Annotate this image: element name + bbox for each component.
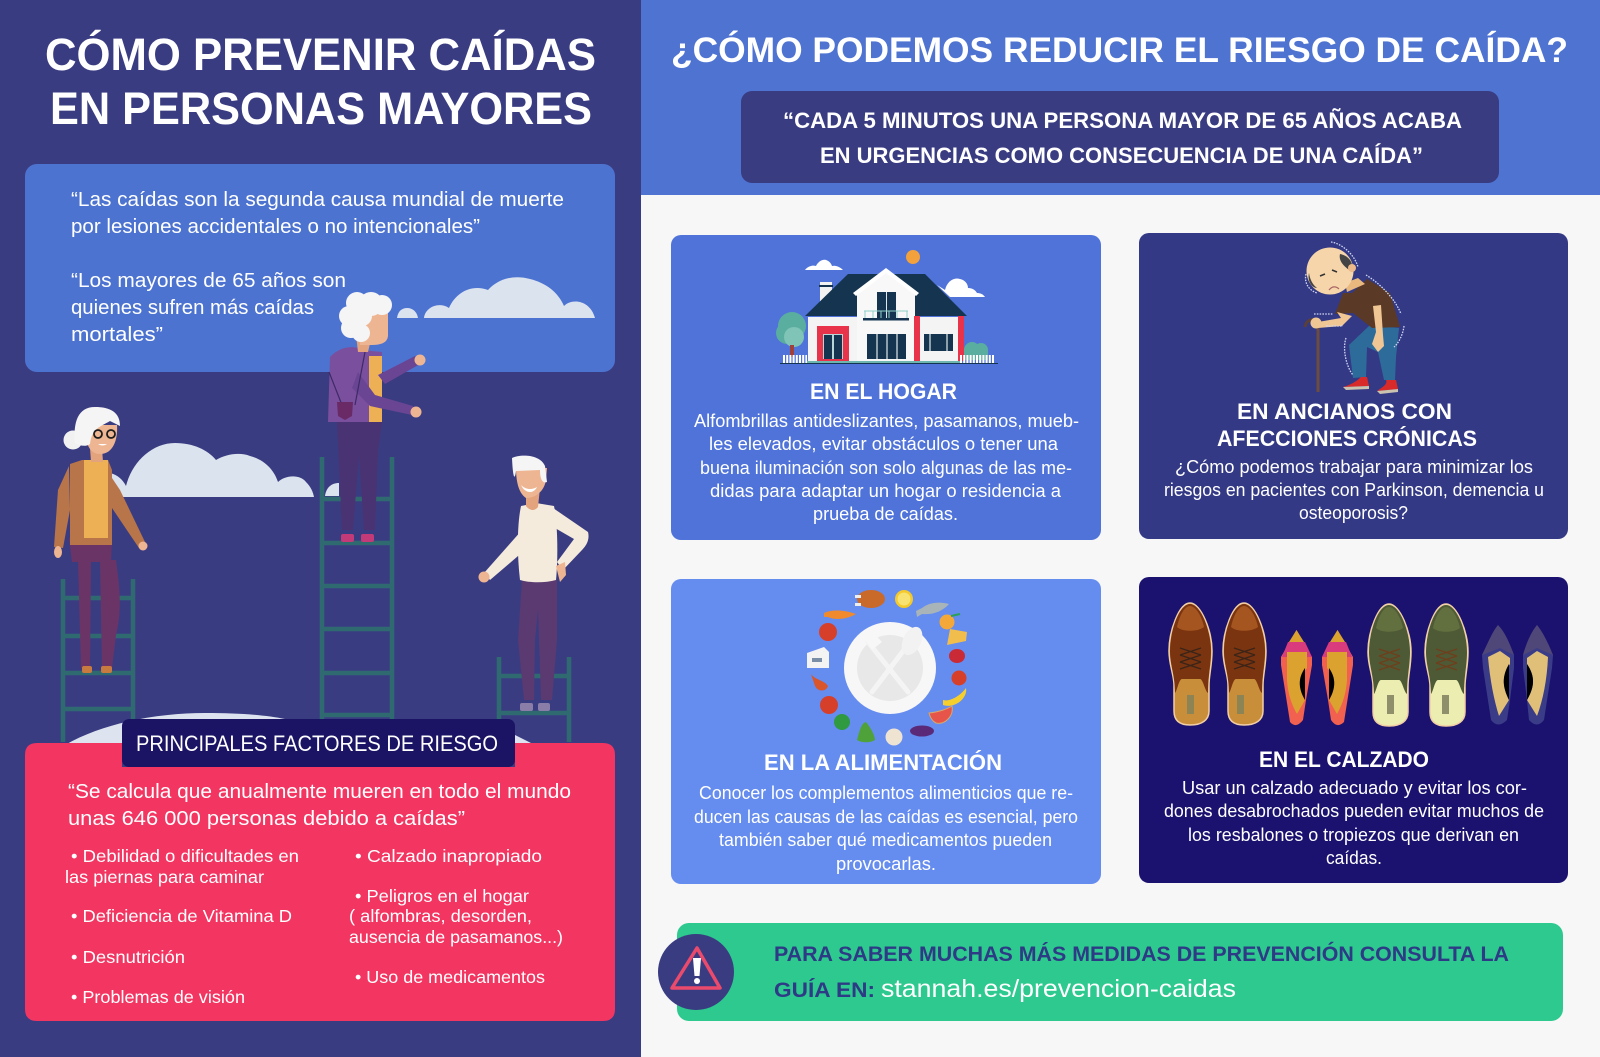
clouds: middle [110,443,339,497]
title [45,29,596,134]
quote: over 65: “Los mayores de 65 años son [71,270,346,292]
text block [694,411,1079,524]
icon: olive shoes [1368,604,1468,726]
list: risk factors left: las piernas para caminar [65,867,264,887]
panel: risk factors [25,743,615,1021]
heading: EN LA ALIMENTACIÓN [764,750,1002,775]
quote: over 65: quienes sufren más caídas [71,297,314,319]
icon: house [776,250,998,364]
text block: ¿Cómo podemos trabajar para minimizar los [1175,457,1533,477]
quote: second cause of death [71,189,564,238]
text block: les elevados, evitar obstáculos o tener una [709,434,1059,454]
title: CÓMO PREVENIR CAÍDAS [45,29,596,80]
person: woman with bag [328,292,426,542]
quote: over 65 [71,270,346,346]
person: woman with glasses [54,407,148,673]
text block: dones desabrochados pueden evitar muchos de [1164,801,1544,821]
ladder: left [63,579,133,742]
list: risk factors left: • Desnutrición [71,947,185,967]
list: risk factors right: ( alfombras, desorden, [349,906,532,926]
list: risk factors right: • Uso de medicamentos [355,967,545,987]
text block: Usar un calzado adecuado y evitar los cor- [1182,778,1527,798]
quote: second cause of death: por lesiones accidentales o no intencionales” [71,216,480,238]
quote: annual deaths [68,781,571,830]
text block: ducen las causas de las caídas es esencial, pero [694,807,1078,827]
text block: osteoporosis? [1299,503,1408,523]
text block: didas para adaptar un hogar o residencia a [710,481,1062,501]
quote: annual deaths: unas 646 000 personas debido a caídas” [68,808,465,830]
icon: plate with food ring [807,590,967,746]
heading [1217,399,1477,451]
list: risk factors left: • Debilidad o dificultades en [71,846,299,866]
person: man [478,456,589,711]
heading: main risk factors: PRINCIPALES FACTORES DE RIESGO [136,731,498,756]
list: risk factors right: • Peligros en el hogar [355,886,529,906]
ladder: right [499,657,569,742]
heading: main risk factors [122,719,515,767]
quote: over 65: mortales” [71,324,163,346]
panel: at home [671,235,1101,540]
text: call to action: stannah.es/prevencion-caidas [881,975,1236,1003]
text block [1164,778,1544,868]
clouds: upper [397,277,595,318]
list: risk factors left [65,846,299,1007]
text block: provocarlas. [836,854,936,874]
text: call to action: PARA SABER MUCHAS MÁS MEDIDAS DE PREVENCIÓN CONSULTA LA [774,941,1509,966]
panel: chronic conditions [1139,233,1568,539]
panel: nutrition [671,579,1101,884]
heading: EN EL CALZADO [1259,747,1429,772]
heading: how to reduce risk: ¿CÓMO PODEMOS REDUCIR EL RIESGO DE CAÍDA? [671,30,1568,70]
heading: EN ANCIANOS CON [1237,399,1452,424]
list: risk factors left: • Deficiencia de Vitamina D [71,906,292,926]
panel: quotes [25,164,615,372]
text block: prueba de caídas. [813,504,958,524]
text: call to action: GUÍA EN: [774,977,875,1002]
list: risk factors left: • Problemas de visión [71,987,245,1007]
panel: left column [0,0,641,1057]
text block [1164,457,1544,523]
heading: AFECCIONES CRÓNICAS [1217,426,1477,451]
text block: riesgos en pacientes con Parkinson, demencia u [1164,480,1544,500]
list: risk factors right: • Calzado inapropiado [355,846,542,866]
panel: footwear [1139,577,1568,883]
title: EN PERSONAS MAYORES [50,83,592,134]
quote: second cause of death: “Las caídas son la segunda causa mundial de muerte [71,189,564,211]
text block: Alfombrillas antideslizantes, pasamanos, mueb- [694,411,1079,431]
icon: pink shoes [1281,630,1353,725]
quote: annual deaths: “Se calcula que anualmente mueren en todo el mundo [68,781,571,803]
list: risk factors right [349,846,563,987]
text block: también saber qué medicamentos pueden [719,830,1052,850]
text: call to action [774,941,1509,1003]
text block: los resbalones o tropiezos que derivan en [1188,825,1519,845]
callout: every 5 minutes: “CADA 5 MINUTOS UNA PERSONA MAYOR DE 65 AÑOS ACABA [783,108,1462,133]
text block [694,783,1078,874]
heading: EN EL HOGAR [810,379,957,404]
callout: every 5 minutes: EN URGENCIAS COMO CONSECUENCIA DE UNA CAÍDA” [820,143,1423,168]
icon: brown shoes [1169,603,1266,725]
ladder: middle [322,457,392,722]
icon: navy shoes [1482,625,1553,724]
text block: caídas. [1326,848,1382,868]
icon: warning [658,934,734,1010]
list: risk factors right: ausencia de pasamanos...) [349,927,563,947]
panel: right header band [641,0,1600,195]
callout: every 5 minutes [741,91,1499,183]
text block: Conocer los complementos alimenticios que re- [699,783,1073,803]
icon: elderly man with cane [1305,242,1404,394]
ground cloud [65,713,535,745]
text block: buena iluminación son solo algunas de las me- [700,458,1072,478]
panel: call to action [658,923,1563,1021]
